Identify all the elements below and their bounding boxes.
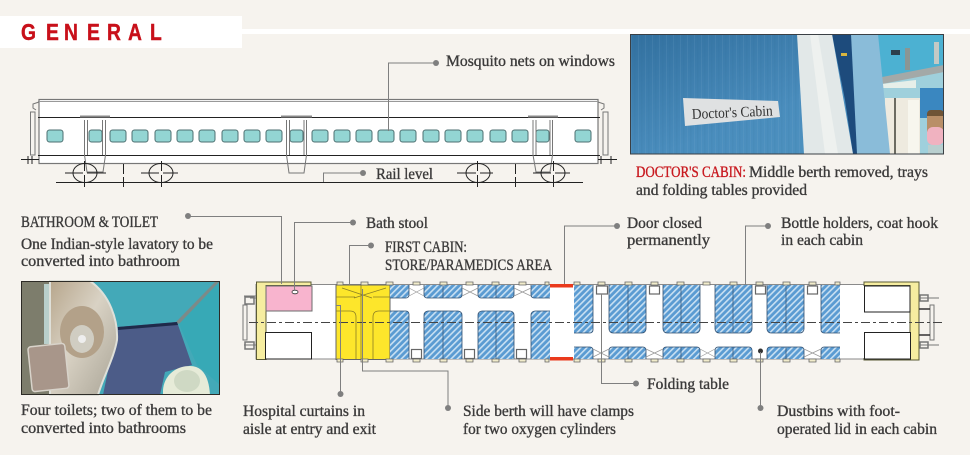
callout: hospital curtains: aisle at entry and exit — [243, 421, 377, 438]
photo: doctor's cabin: Doctor's Cabin — [691, 103, 774, 123]
caption: four toilets — [21, 402, 212, 437]
callout: mosquito nets on windows: Mosquito nets on windows — [446, 53, 615, 70]
callout: dustbins: Dustbins with foot- — [777, 403, 900, 420]
couplers — [243, 295, 939, 349]
closed doors: red — [550, 284, 573, 360]
yellow end: right — [864, 282, 919, 360]
callout: door closed permanently — [564, 215, 710, 284]
callout: mosquito nets on windows — [388, 53, 615, 131]
callout: side berth clamps: Side berth will have clamps — [463, 403, 634, 420]
caption: doctor's cabin — [636, 164, 928, 199]
berths: hatched blue — [390, 285, 840, 359]
callout: folding table: Folding table — [647, 376, 729, 393]
caption: doctor's cabin: DOCTOR'S CABIN: — [636, 164, 746, 181]
first cabin: store/paramedics — [336, 285, 390, 360]
text block: bathroom and toilet — [21, 214, 213, 270]
caption: doctor's cabin: and folding tables provided — [636, 182, 807, 199]
toilet cubicle — [266, 332, 312, 359]
windows row — [47, 130, 591, 142]
callout: rail level: Rail level — [376, 166, 434, 183]
callout: side berth clamps: for two oxygen cylinders — [463, 421, 616, 438]
caption: doctor's cabin: Middle berth removed, trays — [749, 164, 928, 181]
yellow end strip: left — [256, 282, 311, 360]
photo: toilet — [21, 281, 220, 395]
callout: bottle holders, coat hook — [746, 215, 938, 285]
callout: hospital curtains: Hospital curtains in — [243, 403, 365, 420]
text block: bathroom and toilet: converted into bathroom — [21, 253, 181, 270]
callout: bath stool: Bath stool — [366, 215, 429, 232]
callout: hospital curtains — [243, 306, 377, 438]
wheels and rail — [56, 161, 583, 187]
title: GENERAL: GENERAL — [21, 19, 162, 45]
folding table crosses — [409, 288, 821, 357]
dustbin — [758, 348, 763, 354]
callout: bath stool — [294, 215, 429, 291]
folding tables — [412, 286, 818, 358]
callout: dustbins — [758, 352, 937, 438]
callout: rail level — [324, 166, 434, 183]
floor plan of coach — [243, 278, 943, 367]
callout: bottle holders, coat hook: Bottle holders, coat hook — [781, 215, 938, 232]
leader: bathroom — [185, 213, 282, 284]
photo: doctor's cabin — [630, 34, 944, 154]
callout: side berth clamps — [362, 289, 634, 438]
callout: folding table — [602, 294, 729, 393]
callout: first cabin store/paramedics area — [350, 239, 552, 285]
callout: first cabin store/paramedics area: STORE/PARAMEDICS AREA — [385, 257, 552, 274]
callout: first cabin store/paramedics area: FIRST CABIN: — [385, 239, 467, 256]
caption: four toilets: converted into bathrooms — [21, 420, 186, 437]
callout: bottle holders, coat hook: in each cabin — [781, 232, 863, 249]
centre line — [249, 322, 943, 324]
text block: bathroom and toilet: One Indian-style lavatory to be — [21, 236, 213, 253]
callout: dustbins: operated lid in each cabin — [777, 421, 937, 438]
bathroom: pink area — [266, 286, 312, 311]
window tabs — [337, 282, 840, 362]
coach ends — [21, 102, 617, 164]
callout: door closed permanently: Door closed — [627, 215, 702, 232]
title: GENERAL — [0, 16, 242, 48]
bath stool — [292, 290, 298, 294]
callout: door closed permanently: permanently — [627, 232, 710, 249]
caption: four toilets: Four toilets; two of them to be — [21, 402, 212, 419]
side elevation of coach — [21, 100, 617, 187]
doors — [80, 116, 558, 173]
text block: bathroom and toilet: BATHROOM & TOILET — [21, 214, 158, 231]
